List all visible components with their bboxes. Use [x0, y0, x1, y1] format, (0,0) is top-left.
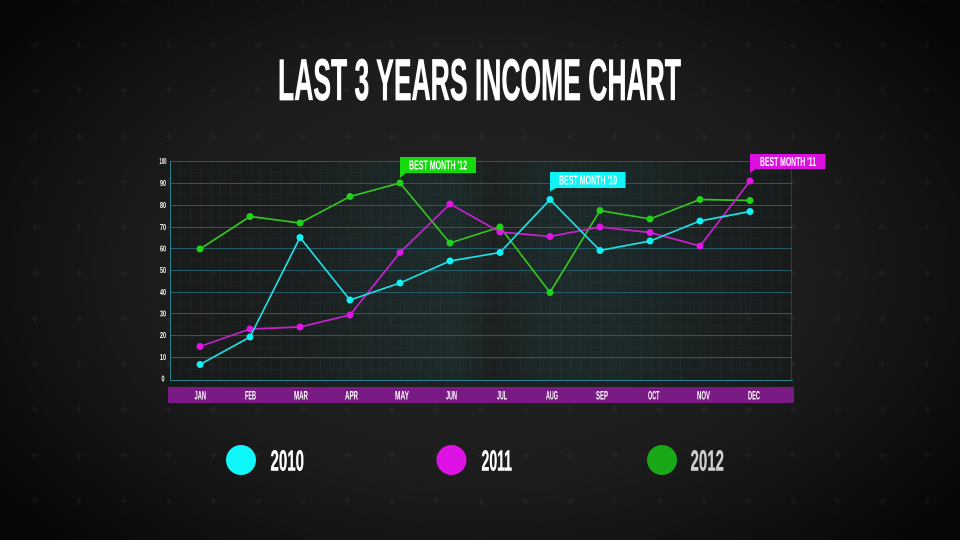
- callout: best month 2011: [750, 154, 826, 173]
- legend item: 2012: [647, 445, 724, 478]
- y axis labels: 50: [160, 266, 166, 275]
- legend: 2011: [482, 446, 512, 478]
- y axis labels: 60: [160, 244, 166, 254]
- y axis labels: 80: [160, 201, 166, 210]
- month bar: SEP: [596, 388, 608, 402]
- y axis labels: 90: [160, 179, 166, 188]
- series 2012: [196, 180, 754, 296]
- y axis labels: 20: [160, 331, 166, 340]
- y axis labels: 100: [160, 157, 167, 166]
- callout: best month 2010: BEST MONTH '10: [559, 174, 617, 188]
- callout: best month 2011: BEST MONTH '11: [760, 155, 816, 169]
- month bar: MAY: [395, 388, 409, 402]
- line chart: [160, 154, 826, 403]
- month bar: JAN: [194, 388, 206, 402]
- month bar: JUL: [497, 388, 507, 402]
- chart grid: [170, 161, 793, 381]
- month bar: APR: [345, 388, 358, 402]
- month bar: MAR: [294, 388, 308, 402]
- callout: best month 2012: BEST MONTH '12: [409, 158, 467, 172]
- month bar: JUN: [446, 388, 457, 402]
- month bar: AUG: [546, 388, 558, 402]
- month bar: DEC: [748, 388, 760, 402]
- callout: best month 2010: [550, 172, 626, 192]
- legend item: 2010: 2010: [270, 446, 304, 478]
- y axis labels: 30: [160, 310, 166, 318]
- series 2011: [196, 178, 754, 350]
- month bar: NOV: [697, 388, 710, 402]
- y axis labels: 0: [162, 374, 165, 384]
- y axis labels: 40: [160, 288, 166, 297]
- y axis labels: [160, 157, 167, 384]
- y axis labels: 10: [160, 353, 166, 362]
- legend item: 2012: 2012: [690, 446, 724, 478]
- series 2010: [196, 196, 754, 368]
- legend item: 2010: [226, 445, 304, 478]
- legend item: 2011: [436, 445, 512, 478]
- month bar: OCT: [648, 388, 660, 402]
- month bar: [168, 387, 794, 403]
- callout: best month 2012: [400, 157, 476, 178]
- legend: [226, 445, 724, 478]
- point: July 2012: [496, 224, 504, 230]
- y axis labels: 70: [160, 223, 166, 232]
- month bar: FEB: [245, 388, 256, 402]
